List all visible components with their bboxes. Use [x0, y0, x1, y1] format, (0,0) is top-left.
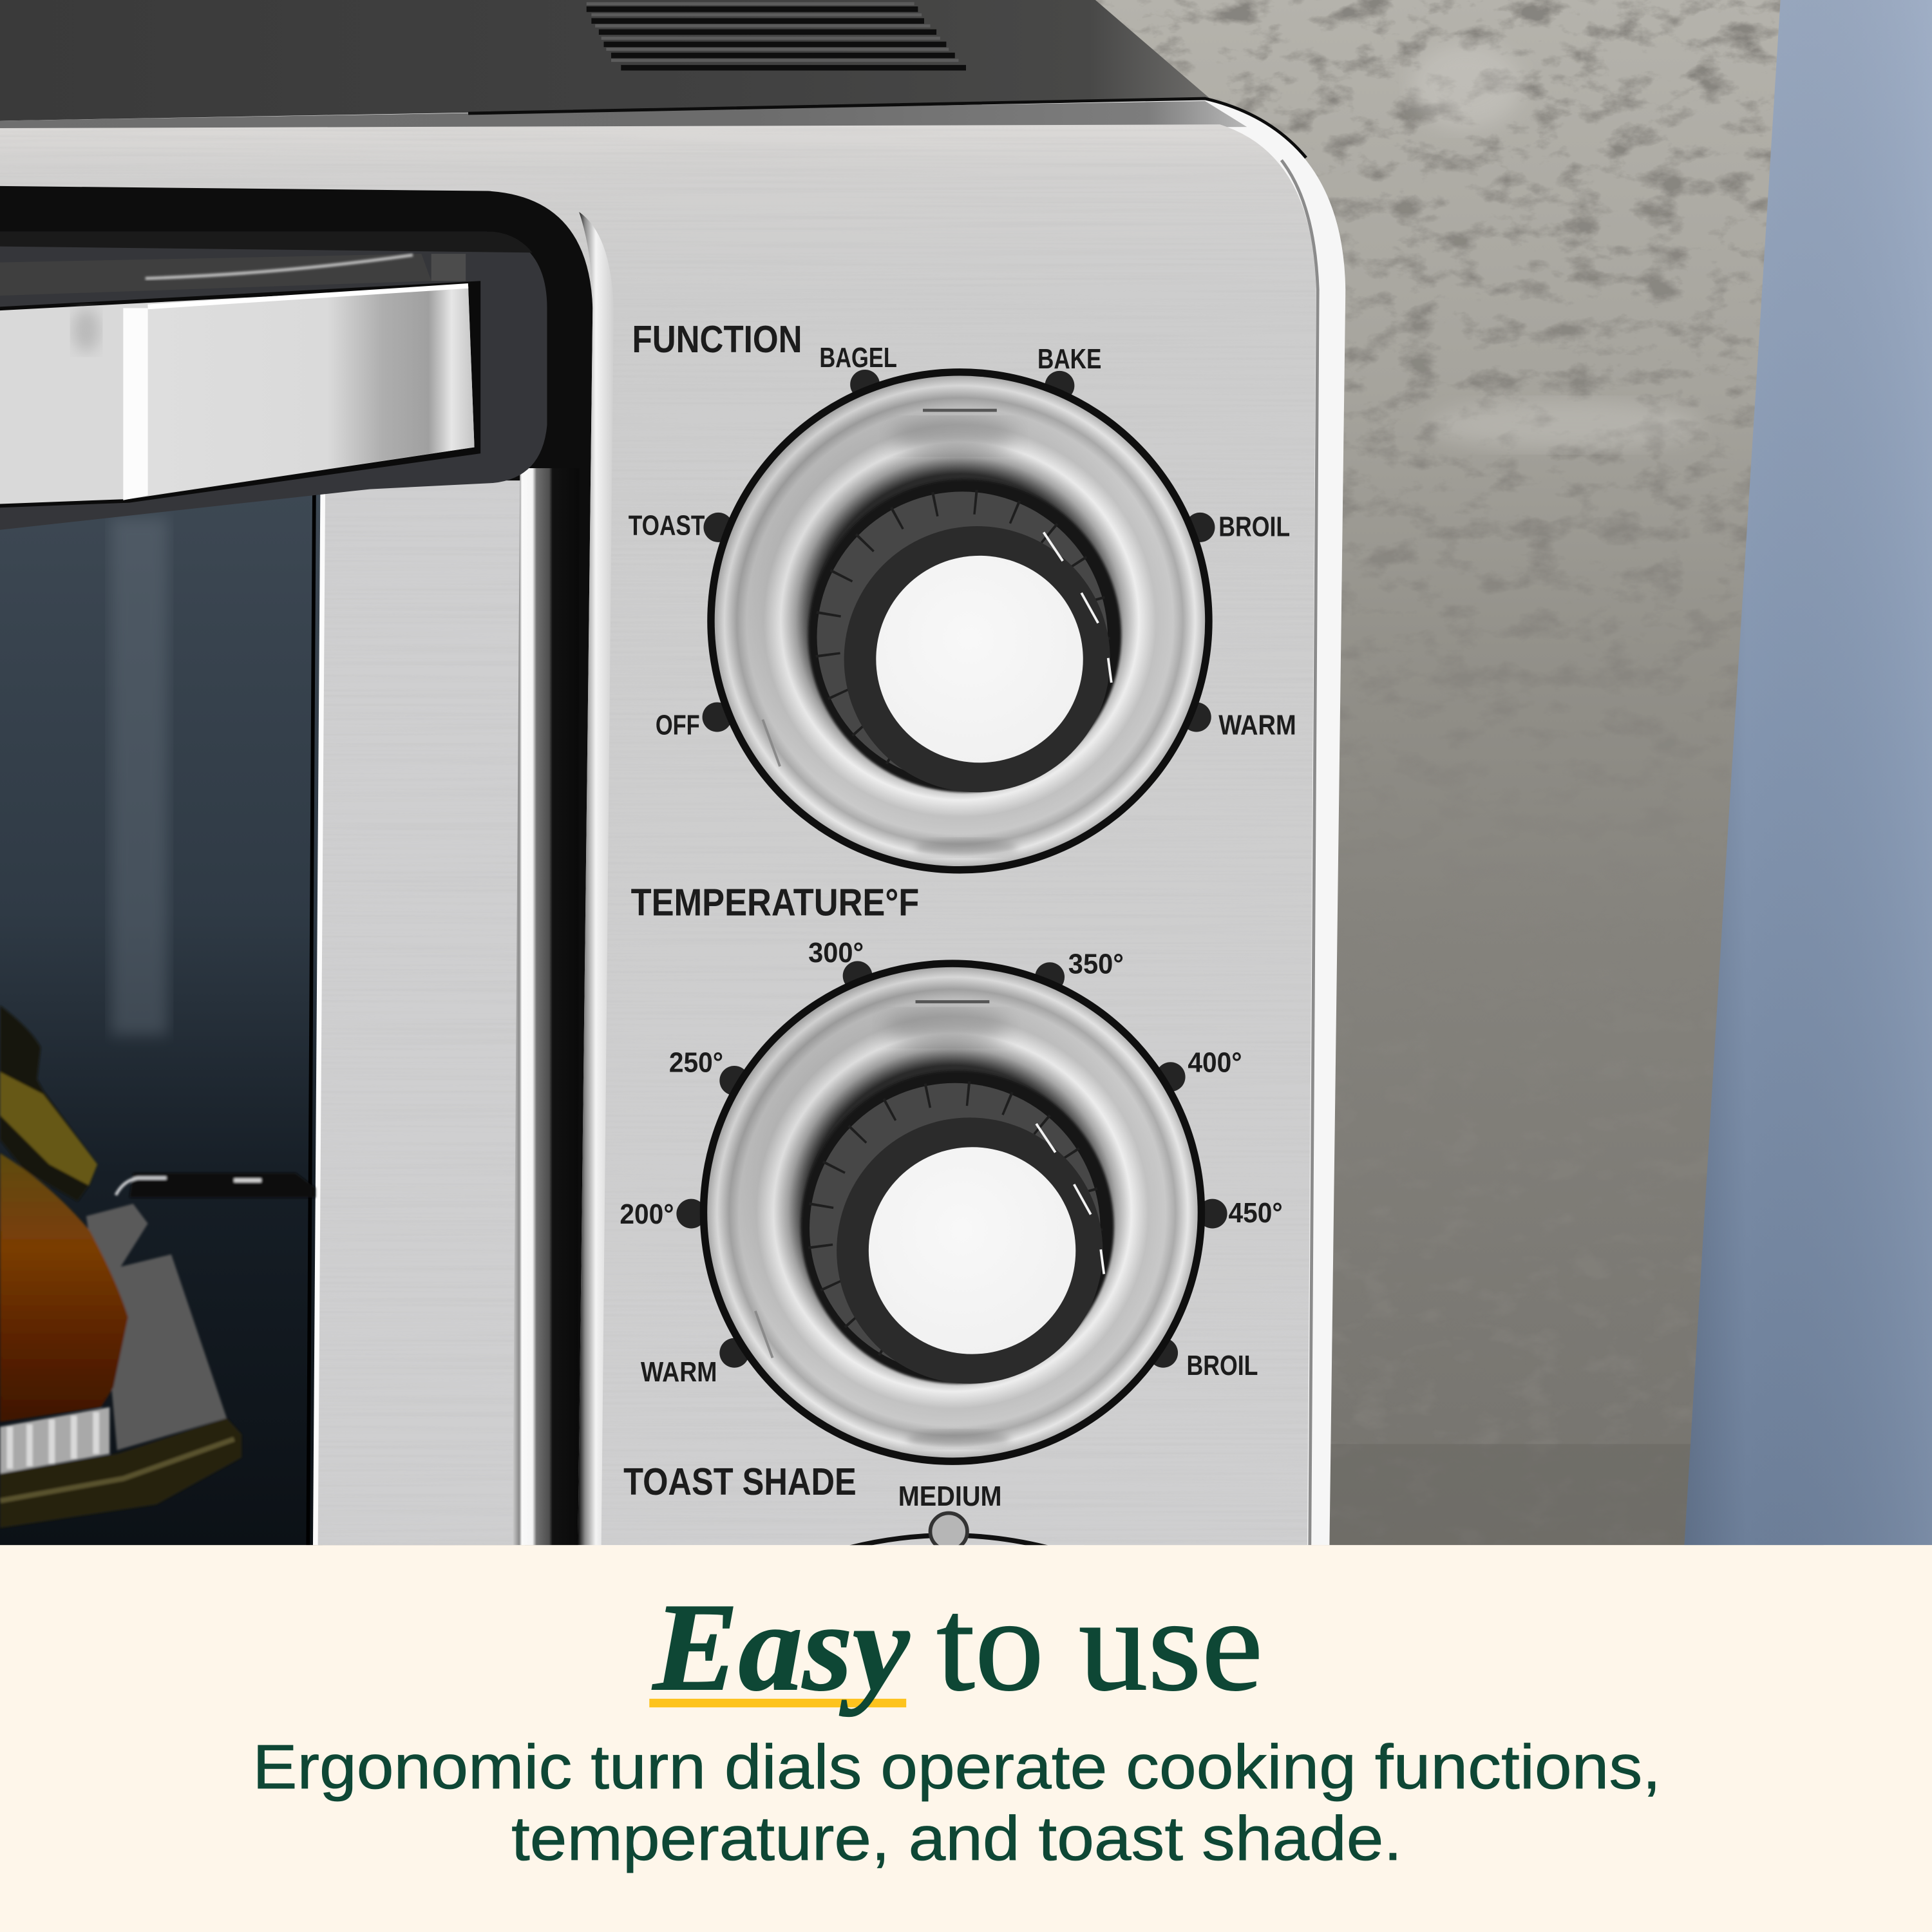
caption panel	[0, 1545, 1932, 1932]
temperature dial	[676, 960, 1227, 1465]
function labels: BAGEL	[819, 342, 897, 374]
oven window	[0, 493, 323, 1545]
function labels: WARM	[1218, 709, 1296, 741]
function labels: TOAST	[629, 509, 705, 541]
temperature labels: 400°	[1188, 1047, 1242, 1079]
temperature labels: 350°	[1068, 948, 1124, 980]
temperature labels: 300°	[808, 937, 864, 969]
heading remainder: to use	[936, 1571, 1263, 1718]
oven top	[0, 0, 1210, 131]
temperature labels	[620, 881, 1283, 1388]
oven front panel	[0, 99, 1345, 1545]
function labels: BROIL	[1218, 511, 1290, 542]
temperature labels: 450°	[1229, 1197, 1283, 1229]
function labels	[629, 317, 1296, 741]
temperature labels: BROIL	[1186, 1350, 1258, 1381]
heading emphasised word: Easy	[652, 1578, 910, 1717]
temperature labels: TEMPERATURE°F	[631, 881, 919, 924]
door frame	[0, 186, 614, 1545]
toast shade label and dial: MEDIUM	[898, 1481, 1001, 1512]
description line 1: Ergonomic turn dials operate cooking functions,	[252, 1732, 1661, 1802]
description line 2: temperature, and toast shade.	[511, 1803, 1402, 1873]
function labels: FUNCTION	[632, 317, 802, 361]
heading highlight underline	[649, 1699, 906, 1707]
toast shade label and dial	[623, 1460, 1047, 1550]
function labels: BAKE	[1037, 343, 1101, 375]
blue curtain	[1684, 0, 1932, 1545]
muffin in oven	[0, 1005, 316, 1528]
background wall	[1084, 0, 1824, 1545]
oven handle	[0, 232, 547, 530]
door side strip	[308, 468, 579, 1545]
toast shade label and dial: TOAST SHADE	[623, 1460, 857, 1503]
temperature labels: WARM	[641, 1356, 717, 1388]
function dial	[703, 368, 1215, 874]
temperature labels: 250°	[669, 1047, 723, 1079]
function labels: OFF	[656, 709, 700, 741]
temperature labels: 200°	[620, 1198, 674, 1230]
